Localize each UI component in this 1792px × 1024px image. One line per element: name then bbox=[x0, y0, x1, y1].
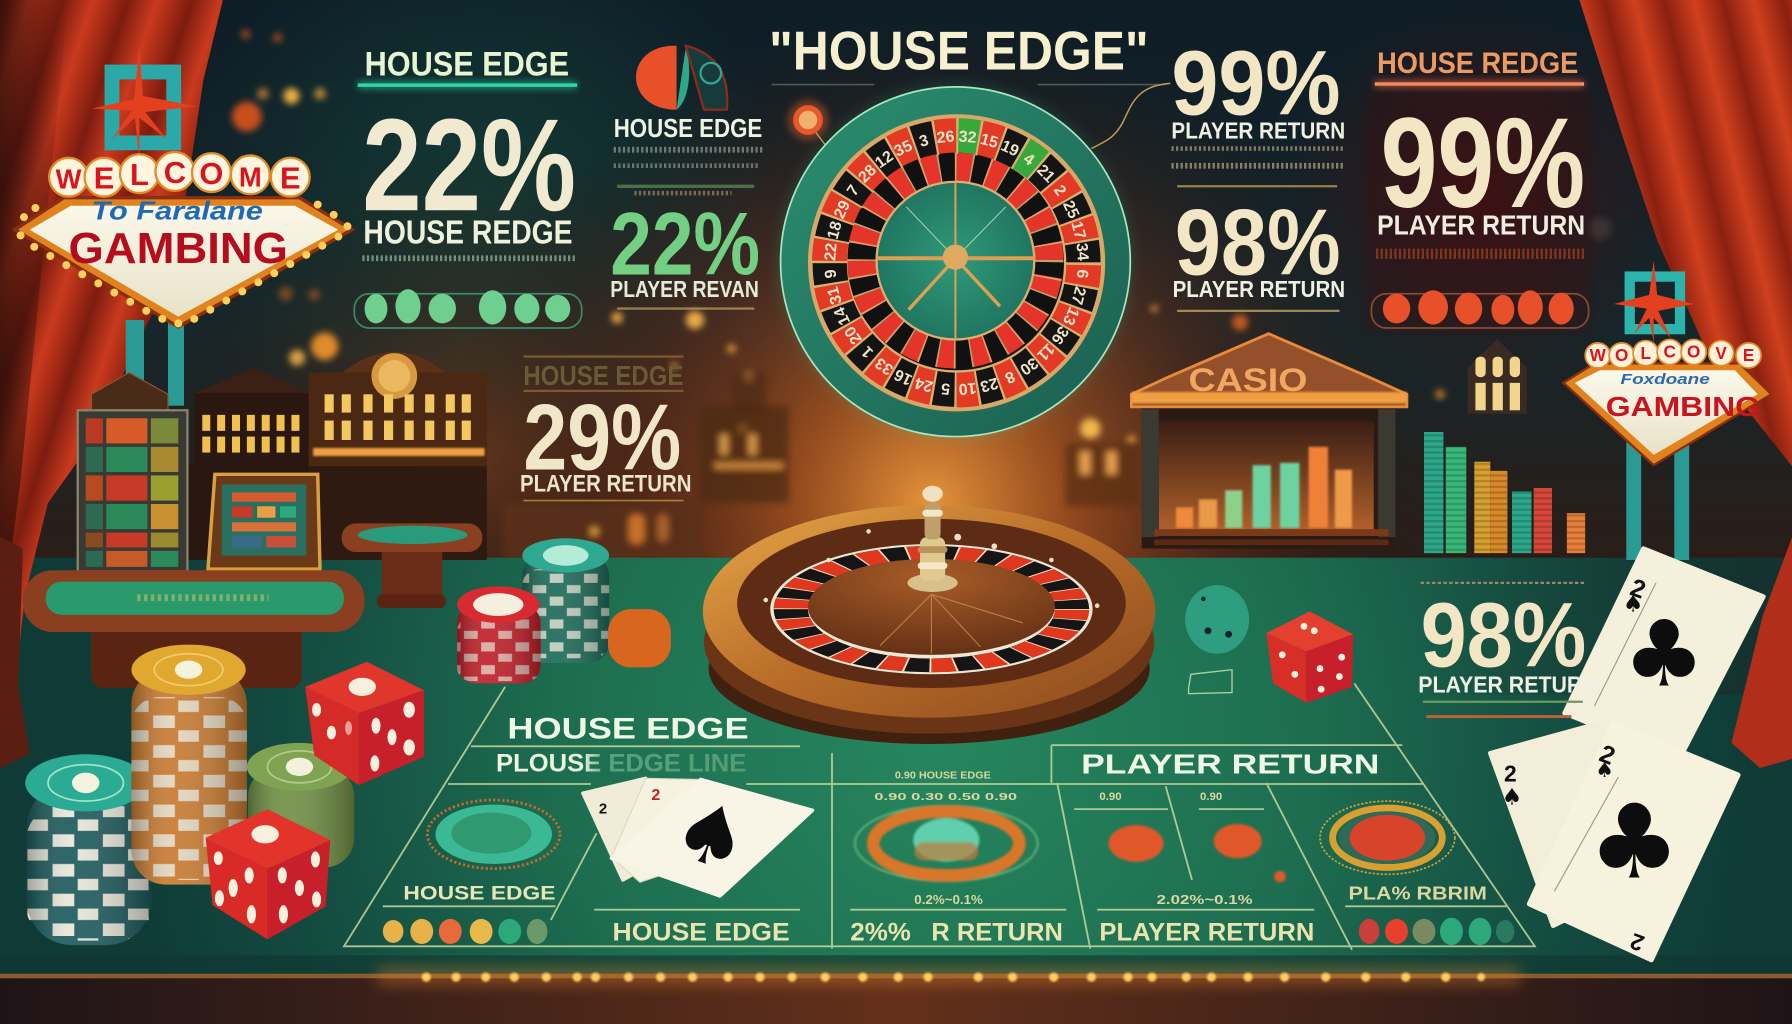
stat: 99% bbox=[1171, 32, 1341, 134]
bar chart bbox=[1176, 447, 1352, 528]
pocket numbers: 21 bbox=[1033, 162, 1058, 186]
pocket numbers: 29 bbox=[831, 198, 854, 221]
stat label: PLAYER RETURN bbox=[1171, 117, 1345, 143]
stat label: PLAYER RETURN bbox=[520, 470, 691, 497]
sign body bbox=[15, 198, 352, 327]
chip stack: olive bbox=[247, 743, 354, 867]
cards: spade fan bbox=[583, 778, 813, 896]
center hub bbox=[877, 182, 1034, 339]
pocket numbers: 28 bbox=[855, 162, 880, 186]
heading: faded: PLOUSE EDGE LINE bbox=[496, 749, 746, 777]
stat: 98% bbox=[1175, 189, 1341, 294]
casino marquee with bar chart bbox=[1131, 334, 1407, 549]
indicator dots bbox=[1359, 918, 1514, 945]
card: lower club: 2 bbox=[1595, 740, 1619, 771]
pocket numbers: 14 bbox=[831, 304, 854, 328]
card: lower club: ♠ bbox=[1595, 758, 1614, 782]
small labels: 0.90 bbox=[1200, 791, 1222, 803]
pocket numbers: 13 bbox=[1059, 304, 1082, 328]
pocket numbers: 11 bbox=[1033, 340, 1057, 364]
die: red front bbox=[206, 809, 330, 939]
pocket numbers bbox=[822, 128, 1091, 397]
small welcome letters: W bbox=[1590, 345, 1607, 365]
label: HOUSE EDGE bbox=[403, 882, 555, 904]
gauge: right bbox=[1320, 801, 1455, 874]
stat: 22% bbox=[362, 91, 576, 238]
chip stack: red bbox=[457, 586, 541, 683]
ball: green bbox=[1185, 585, 1249, 694]
card: lower back: ♠ bbox=[1502, 785, 1522, 811]
pocket numbers: 10 bbox=[958, 379, 977, 397]
card: lower club: ♣ bbox=[1588, 784, 1680, 903]
chip stack chart bbox=[1424, 432, 1585, 553]
chip stack: green bbox=[522, 538, 609, 663]
cards: spade fan: 2 bbox=[651, 787, 660, 804]
indicator dots bbox=[354, 289, 582, 328]
chip: orange bbox=[608, 609, 671, 667]
cards: spade fan: ♠ bbox=[660, 779, 762, 894]
stat: 29% bbox=[523, 385, 681, 490]
small sign body bbox=[1563, 363, 1771, 465]
welcome sign small bbox=[1563, 261, 1771, 560]
pocket numbers: 34 bbox=[1072, 242, 1091, 262]
label: PLAYER RETURN bbox=[1099, 919, 1314, 947]
icon: gauge bbox=[636, 46, 727, 110]
pocket numbers: 9 bbox=[823, 269, 840, 279]
pocket numbers: 33 bbox=[872, 354, 897, 378]
welcome letters: O bbox=[199, 156, 223, 191]
stat label: HOUSE REDGE bbox=[363, 214, 573, 251]
left curtain bbox=[0, 0, 223, 768]
pocket numbers: 18 bbox=[825, 219, 846, 241]
panel: ghost house edge with 29 percent bbox=[520, 357, 691, 501]
small welcome letters: L bbox=[1640, 343, 1651, 363]
pocket numbers: 1 bbox=[859, 342, 877, 361]
pocket numbers: 17 bbox=[1067, 220, 1088, 241]
background city silhouette bbox=[503, 371, 1141, 560]
card: lower club bbox=[1529, 723, 1738, 960]
die: right bbox=[1266, 611, 1353, 703]
small welcome letters: C bbox=[1664, 342, 1676, 362]
card: upper club: ♣ bbox=[1623, 601, 1705, 708]
pocket numbers: 22 bbox=[822, 242, 841, 262]
pocket numbers: 5 bbox=[940, 379, 951, 397]
faded heading: HOUSE EDGE bbox=[523, 360, 683, 391]
starburst icon bbox=[91, 48, 197, 160]
stat: right 98 percent: 98% bbox=[1421, 584, 1586, 686]
small sign gambling: GAMBING bbox=[1606, 391, 1760, 422]
stat: 99% bbox=[1381, 92, 1585, 235]
sign poles and frame bbox=[112, 72, 184, 416]
card: upper club: ♠ bbox=[1623, 591, 1643, 617]
small labels: 2.02%~0.1% bbox=[1157, 893, 1253, 907]
panel: betting layout bbox=[344, 683, 1535, 950]
panel: center player return stats bbox=[1171, 32, 1345, 311]
card: lower back: 2 bbox=[1504, 761, 1517, 787]
right curtain bbox=[1579, 0, 1792, 768]
small labels: 0.90 0.30 0.50 0.90 bbox=[874, 792, 1018, 803]
indicator dots bbox=[1371, 290, 1589, 328]
small sign script: Foxdoane bbox=[1621, 372, 1710, 388]
small round table bbox=[342, 523, 482, 608]
slot board sign bbox=[78, 373, 187, 571]
pocket numbers: 31 bbox=[825, 284, 846, 306]
background bokeh lights bbox=[232, 30, 1611, 445]
card: upper club: 2 bbox=[1627, 574, 1649, 605]
stat label: PLAYER RETURN bbox=[1173, 276, 1345, 302]
arrow: connector to wheel bbox=[1091, 83, 1170, 149]
outer pockets bbox=[830, 136, 1083, 390]
label: R RETURN bbox=[931, 919, 1063, 947]
panel: left house edge stats bbox=[354, 45, 582, 328]
pocket numbers: 36 bbox=[1047, 323, 1072, 347]
welcome letters: E bbox=[94, 161, 114, 196]
monitor board bbox=[208, 474, 320, 569]
pocket numbers: 27 bbox=[1067, 285, 1088, 306]
die: red back bbox=[305, 662, 424, 785]
heading: player return: PLAYER RETURN bbox=[1081, 749, 1379, 780]
pocket numbers: 32 bbox=[958, 128, 977, 147]
pocket numbers: 16 bbox=[892, 365, 915, 388]
stat: 22% bbox=[610, 193, 760, 293]
icon: green chip bbox=[427, 800, 560, 869]
pocket numbers: 19 bbox=[998, 138, 1021, 160]
welcome letters: C bbox=[164, 155, 186, 190]
pocket numbers: 23 bbox=[978, 374, 1000, 395]
chip stack: teal bbox=[25, 754, 152, 945]
welcome sign large bbox=[15, 48, 352, 416]
small welcome letters: O bbox=[1615, 345, 1628, 365]
pocket numbers: 4 bbox=[1020, 150, 1037, 170]
small labels bbox=[874, 770, 1253, 907]
pocket numbers: 6 bbox=[1073, 269, 1091, 279]
welcome letters: E bbox=[280, 161, 301, 196]
red markers bbox=[1109, 824, 1286, 882]
pocket numbers: 15 bbox=[978, 131, 1000, 152]
icon: marker dot bbox=[787, 99, 830, 151]
pocket numbers: 30 bbox=[1016, 354, 1041, 378]
cards: spade fan: 2 bbox=[599, 802, 607, 818]
bulbs bbox=[422, 973, 1485, 982]
sign gambling: GAMBING bbox=[69, 225, 288, 273]
label: HOUSE EDGE bbox=[613, 919, 790, 947]
small starburst icon bbox=[1614, 261, 1694, 343]
card: upper club bbox=[1565, 549, 1763, 760]
pocket numbers: 7 bbox=[844, 182, 863, 199]
label: PLA% RBRIM bbox=[1349, 882, 1487, 903]
title: "HOUSE EDGE" bbox=[769, 20, 1149, 82]
card: lower club: 2 bbox=[1627, 928, 1647, 957]
layout lines bbox=[344, 683, 1535, 950]
sign bulbs bbox=[17, 201, 351, 327]
pocket numbers: 2 bbox=[1050, 182, 1069, 199]
pocket numbers: 24 bbox=[913, 374, 935, 395]
welcome letters bbox=[49, 152, 310, 197]
welcome letters: W bbox=[56, 164, 82, 195]
pocket numbers: 12 bbox=[872, 148, 897, 172]
gauge: center bbox=[855, 806, 1038, 881]
small welcome letters: V bbox=[1715, 343, 1727, 363]
inner pockets bbox=[862, 167, 1049, 354]
pocket numbers: 26 bbox=[936, 128, 955, 147]
heading: HOUSE EDGE bbox=[614, 113, 762, 143]
stat label: PLAYER REVAN bbox=[610, 276, 759, 302]
heading: HOUSE REDGE bbox=[1377, 47, 1578, 80]
panel: right house edge stats bbox=[1365, 47, 1590, 331]
left card table bbox=[23, 570, 365, 688]
panel: gauge and green stats bbox=[610, 46, 762, 309]
small welcome letters: E bbox=[1743, 345, 1754, 365]
indicator dots bbox=[383, 919, 547, 944]
small welcome letters: O bbox=[1687, 342, 1700, 362]
marquee text: CASIO bbox=[1189, 362, 1307, 398]
label: 2%% bbox=[850, 919, 911, 947]
sign script: To Faralane bbox=[91, 195, 263, 225]
tower building bbox=[1467, 339, 1527, 414]
pocket numbers: 20 bbox=[842, 323, 866, 347]
pocket numbers: 35 bbox=[892, 137, 915, 160]
welcome letters: M bbox=[239, 161, 262, 192]
heading: HOUSE EDGE bbox=[365, 45, 569, 83]
pocket numbers: 3 bbox=[918, 132, 931, 151]
left casino buildings bbox=[183, 352, 487, 560]
pocket numbers: 25 bbox=[1059, 198, 1082, 222]
spindle bbox=[907, 486, 958, 592]
center roulette table bbox=[703, 486, 1155, 744]
small sign poles and frame bbox=[1626, 277, 1689, 560]
pocket numbers: 8 bbox=[1002, 367, 1017, 386]
felt table bbox=[0, 558, 1792, 978]
small labels: 0.2%~0.1% bbox=[914, 893, 983, 907]
heading: house edge: HOUSE EDGE bbox=[507, 712, 749, 745]
small labels: 0.90 bbox=[1099, 791, 1122, 803]
stat label: PLAYER RETURN bbox=[1377, 209, 1585, 240]
wheel number ring bbox=[770, 544, 1093, 674]
welcome letters: L bbox=[130, 157, 149, 192]
small welcome letters bbox=[1585, 339, 1761, 368]
small labels: 0.90 HOUSE EDGE bbox=[895, 770, 991, 781]
roulette wheel diagram bbox=[778, 85, 1133, 439]
chip stack: orange bbox=[131, 645, 247, 885]
stat: right 98 percent: PLAYER RETURN bbox=[1418, 672, 1598, 698]
card: lower back bbox=[1490, 721, 1646, 926]
bottom light strip bbox=[0, 967, 1792, 1024]
